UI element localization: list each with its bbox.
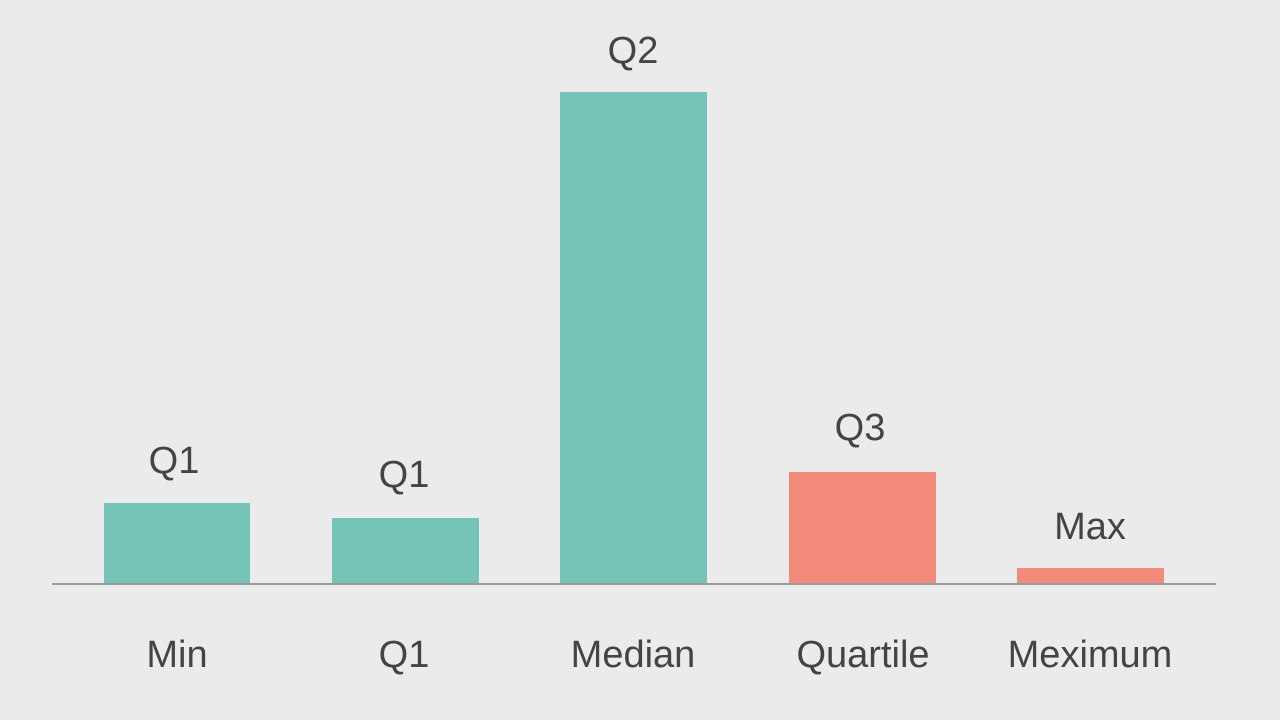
category label: Min: Min xyxy=(146,634,208,676)
bar label: Q1: Q1 xyxy=(379,454,429,496)
bar: Median xyxy=(560,92,707,584)
bar label: Q2: Q2 xyxy=(608,30,658,72)
category label: Meximum: Meximum xyxy=(1008,634,1172,676)
bar: Maximum xyxy=(1017,568,1164,584)
axis baseline xyxy=(52,583,1216,585)
category label: Quartile: Quartile xyxy=(796,634,930,676)
bar label: Q3: Q3 xyxy=(835,407,885,449)
bar label: Q1 (Min): Q1 xyxy=(149,440,199,482)
bar: Q1 xyxy=(332,518,479,584)
category label: Median: Median xyxy=(571,634,695,676)
category label: Q1: Q1 xyxy=(379,634,429,676)
bar label: Max: Max xyxy=(1054,506,1126,548)
bar: Min xyxy=(104,503,250,584)
bar: Quartile xyxy=(789,472,936,584)
